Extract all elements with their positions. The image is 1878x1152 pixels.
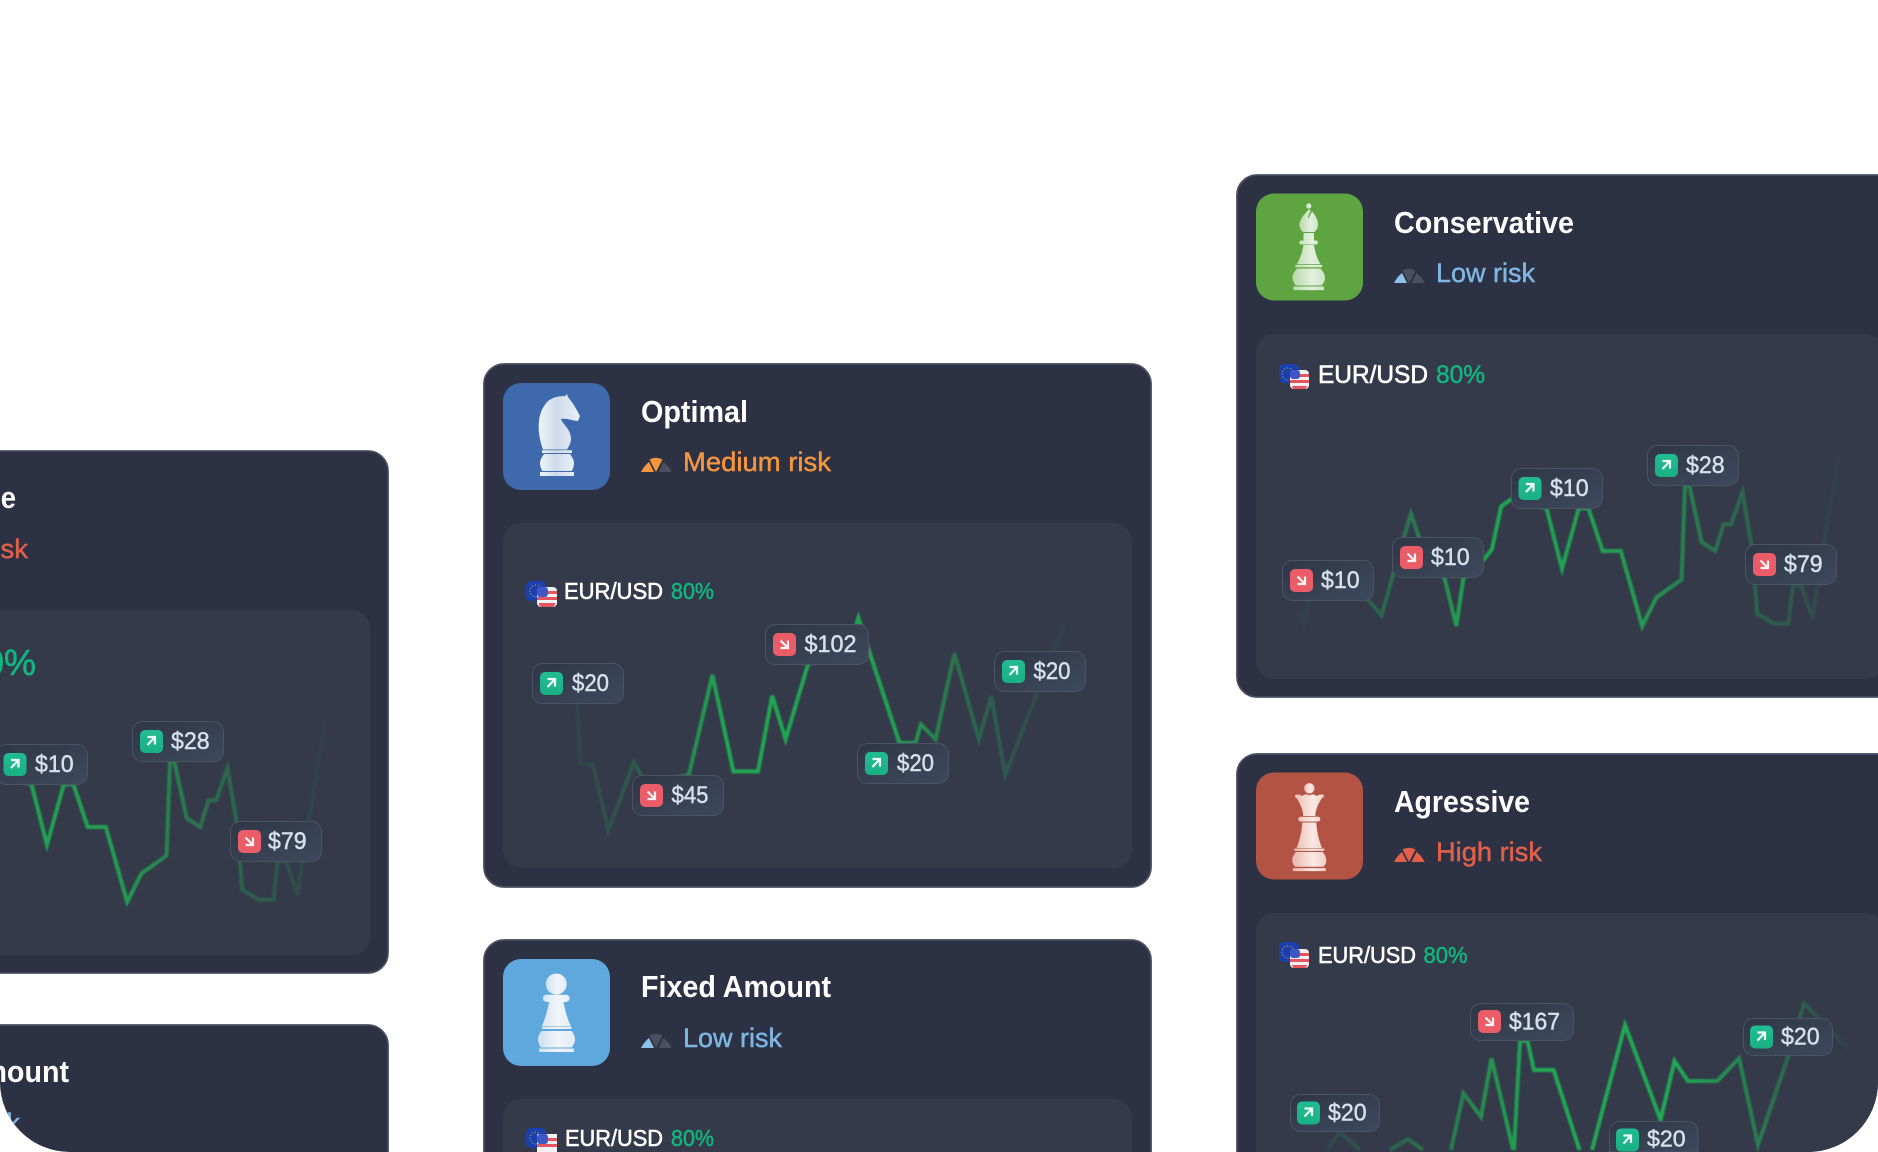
trade chip: $20 up [1290,1094,1380,1132]
trade chip: $20 up: $20 [1781,1024,1820,1050]
icon: EUR/USD flags [1279,364,1309,389]
trade chip: $10 up: $10 [35,751,74,778]
trade chip: $102 down [766,624,868,664]
trade chip: $10 down [1282,560,1374,600]
win rate: 80% [671,578,714,604]
line chart [577,618,1066,830]
chart panel [1256,334,1878,679]
panel: Fixed Amount card, left copy [0,1025,388,1152]
trade chip: $20 up [1610,1122,1698,1152]
trade chip: $79 down [230,822,322,862]
icon: risk gauge high [1394,848,1425,862]
chart panel [0,610,370,955]
trade chip: $79 down [1746,544,1836,584]
heading: Conservative: Conservative [1394,205,1574,240]
panel: Fixed Amount strategy card [484,940,1151,1152]
heading: Optimal: Optimal [641,394,748,429]
chart panel [1256,913,1878,1152]
trade chip: $20 up [1744,1018,1832,1056]
line chart [23,761,315,908]
icon: risk gauge low [641,1034,672,1048]
icon: bishop on green tile [1256,194,1363,300]
panel: Optimal strategy card [484,364,1151,887]
trade chip: $79 down: $79 [1784,551,1823,578]
icon: queen on red tile [1256,772,1363,880]
trade chip: $20 up [858,744,948,784]
line chart [1327,1003,1850,1150]
risk label: high risk: High risk [1436,837,1542,867]
panel: Martingale strategy card [0,451,388,973]
trade chip: $28 up: $28 [171,728,210,755]
trade chip: $28 up [1648,446,1738,486]
trade chip: $167 down [1470,1004,1574,1040]
trade chip: $10 up [0,744,88,784]
pair label: EUR/USD [1318,361,1428,389]
trade chip: $10 up [1512,468,1602,508]
trade chip: $20 up [532,664,624,704]
icon: EUR/USD flags [526,1128,557,1152]
risk label: medium risk: Medium risk [683,447,831,477]
icon: EUR/USD flags [526,581,557,607]
trade chip: $45 down [632,776,724,816]
chart panel [503,523,1132,868]
trade chip: $10 down: $10 [1431,544,1470,571]
pair label: EUR/USD [565,1125,663,1151]
trade chip: $28 up [132,722,224,762]
icon: risk gauge medium [641,458,672,472]
pair label: EUR/USD [1318,942,1416,968]
trade chip: $45 down: $45 [672,782,708,809]
trade chip: $20 up: $20 [1647,1126,1686,1152]
trade chip: $20 up: $20 [1034,658,1070,685]
trade chip: $20 up [994,652,1086,692]
risk label: low risk: Low risk [683,1023,782,1053]
icon: risk gauge low [1394,269,1425,283]
trade chip: $20 up: $20 [1328,1100,1367,1126]
icon: knight on blue tile [503,383,610,490]
trade chip: $28 up: $28 [1686,452,1725,479]
win rate: 80% [1424,942,1468,968]
heading: Agressive: Agressive [1394,784,1530,819]
trade chip: $20 up: $20 [572,670,609,697]
heading: Fixed Amount: Fixed Amount [641,969,831,1004]
trade chip: $102 down: $102 [804,631,856,658]
win rate: 80% [671,1125,714,1151]
panel: Agressive strategy card [1237,754,1878,1152]
icon: EUR/USD flags [1279,942,1309,968]
risk label: low risk: Low risk [1436,258,1535,288]
trade chip: $20 up: $20 [897,750,934,777]
trade chip: $10 up: $10 [1550,475,1589,502]
line chart [1300,442,1841,626]
trade chip: $79 down: $79 [268,828,307,855]
trade chip: $10 down: $10 [1321,567,1360,594]
pair label: EUR/USD [564,578,663,604]
panel: Conservative strategy card [1237,175,1878,697]
win rate: 80% [1436,361,1485,389]
trade chip: $10 down [1392,538,1484,578]
chart panel [503,1099,1132,1152]
trade chip: $167 down: $167 [1509,1008,1560,1036]
icon: pawn on light blue tile [503,959,610,1066]
